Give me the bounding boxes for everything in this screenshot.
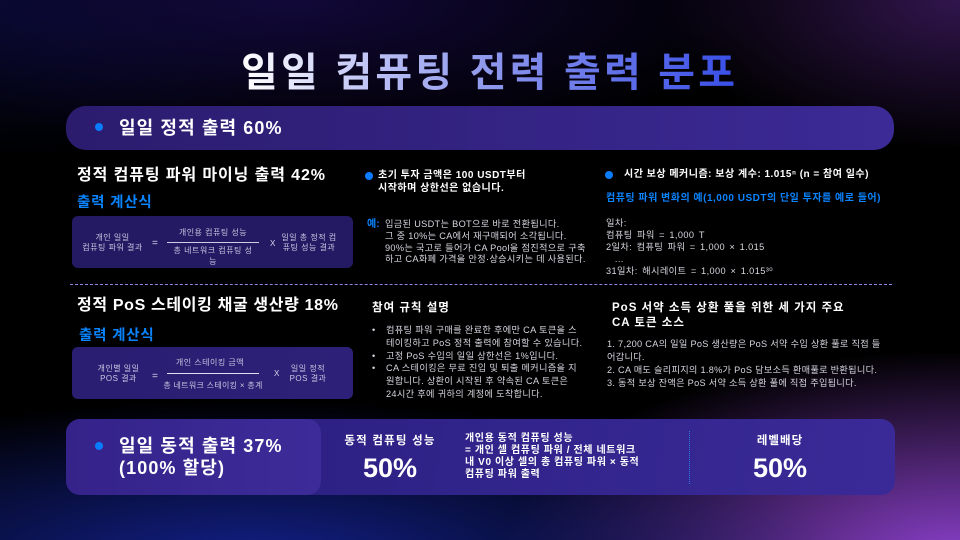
heading xyxy=(119,436,283,478)
formula left term xyxy=(82,233,143,252)
numbered list: 2. CA 매도 슬리피지의 1.8%가 PoS 담보소득 환매풀로 반환됩니다. xyxy=(607,365,877,375)
stat: leverage dividend xyxy=(753,434,807,483)
rule list: 24시간 후에 귀하의 계정에 도착합니다. xyxy=(386,389,543,399)
panel: static PoS staking xyxy=(72,296,353,399)
note: initial investment xyxy=(365,169,526,194)
formula right term: 일일 정적 xyxy=(291,364,325,373)
calculation lines: 2일차: 컴퓨팅 파워 = 1,000 × 1.015 xyxy=(606,242,765,252)
stat: dynamic performance xyxy=(344,434,436,483)
stat: dynamic performance: 50% xyxy=(363,453,417,483)
formula right term: 일일 총 정적 컴 xyxy=(281,233,337,242)
formula text: 개인용 동적 컴퓨팅 성능 xyxy=(465,433,573,444)
calculation lines: 일차: xyxy=(606,218,627,228)
rule list: 컴퓨팅 파워 구매를 완료한 후에만 CA 토큰을 스 xyxy=(386,325,577,335)
bullet xyxy=(365,172,373,180)
formula box xyxy=(72,216,353,268)
formula right term: 퓨팅 성능 결과 xyxy=(283,243,335,252)
rule list: 원합니다. 상환이 시작된 후 약속된 CA 토큰은 xyxy=(386,376,568,386)
dashed divider xyxy=(70,284,892,285)
banner icon: bullet xyxy=(95,123,103,131)
calculation lines: ... xyxy=(615,254,624,264)
fraction: 개인용 컴퓨팅 성능 xyxy=(179,228,247,237)
panel: time reward mechanism xyxy=(605,168,881,276)
example body: 입금된 USDT는 BOT으로 바로 전환됩니다. xyxy=(385,219,560,229)
rule list: CA 스테이킹은 무료 진입 및 퇴출 메커니즘을 지 xyxy=(386,363,577,373)
formula left term: 컴퓨팅 파워 결과 xyxy=(82,243,143,252)
banner: daily static output xyxy=(66,106,894,150)
numbered list: 어갑니다. xyxy=(607,352,645,362)
fraction xyxy=(167,228,259,266)
equals sign: = xyxy=(152,371,158,382)
formula box xyxy=(72,347,353,399)
stat: dynamic performance: 동적 컴퓨팅 성능 xyxy=(344,435,436,447)
fraction: 총 네트워크 스테이킹 × 총계 xyxy=(163,381,263,390)
multiply sign: X xyxy=(270,239,275,248)
heading: 참여 규칙 설명 xyxy=(372,302,450,314)
fraction: 능 xyxy=(209,257,217,266)
highlighted heading box xyxy=(66,419,321,495)
blue example heading: 컴퓨팅 파워 변화의 예(1,000 USDT의 단일 투자를 예로 들어) xyxy=(606,193,881,204)
rule list: • xyxy=(372,363,376,373)
numbered list: 1. 7,200 CA의 일일 PoS 생산량은 PoS 서약 수입 상환 풀로 직접 들 xyxy=(607,339,881,349)
equals sign: = xyxy=(152,238,158,249)
formula text xyxy=(465,432,639,480)
formula text: = 개인 셀 컴퓨팅 파워 / 전체 네트워크 xyxy=(465,445,636,456)
formula left term xyxy=(97,364,140,383)
numbered list xyxy=(607,339,881,388)
heading: CA 토큰 소스 xyxy=(612,316,685,328)
bullet xyxy=(95,442,103,450)
heading: 시간 보상 메커니즘: 보상 계수: 1.015ⁿ (n = 참여 일수) xyxy=(624,169,869,180)
rule list xyxy=(372,325,582,399)
text xyxy=(378,169,526,194)
calculation lines: 컴퓨팅 파워 = 1,000 T xyxy=(606,230,705,240)
title: 일일 컴퓨팅 전력 출력 분포 xyxy=(241,51,738,95)
rule list: 테이킹하고 PoS 정적 출력에 참여할 수 있습니다. xyxy=(386,338,582,348)
text: 시작하며 상한선은 없습니다. xyxy=(378,182,504,194)
calculation lines: 31일차: 해시레이트 = 1,000 × 1.015³⁰ xyxy=(606,266,773,276)
fraction: 개인 스테이킹 금액 xyxy=(176,358,244,367)
formula right term xyxy=(290,364,326,383)
heading: 일일 동적 출력 37% xyxy=(119,436,283,456)
example body: 하고 CA화폐 가격을 안정·상승시키는 데 사용된다. xyxy=(385,254,586,264)
rule list: 고정 PoS 수입의 일일 상한선은 1%입니다. xyxy=(386,351,558,361)
subheading: 출력 계산식 xyxy=(77,195,153,211)
heading: (100% 할당) xyxy=(119,458,225,478)
formula right term xyxy=(281,233,337,252)
formula text: 내 V0 이상 셀의 총 컴퓨팅 파워 × 동적 xyxy=(465,457,639,468)
formula right term: POS 결과 xyxy=(290,374,326,383)
numbered list: 3. 동적 보상 잔액은 PoS 서약 소득 상환 풀에 직접 주입됩니다. xyxy=(607,378,857,388)
stat: leverage dividend: 레벨배당 xyxy=(757,435,803,447)
example body: 90%는 국고로 들어가 CA Pool을 점진적으로 구축 xyxy=(385,243,586,253)
heading: PoS 서약 소득 상환 풀을 위한 세 가지 주요 xyxy=(612,302,845,314)
panel: daily dynamic output xyxy=(66,419,895,495)
bullet xyxy=(605,171,613,179)
panel: participation rules xyxy=(372,301,582,399)
heading xyxy=(612,301,845,328)
panel: PoS income sources xyxy=(607,301,881,388)
panel: static computing mining output xyxy=(72,166,353,268)
stat: leverage dividend: 50% xyxy=(753,453,807,483)
formula left term: POS 결과 xyxy=(100,374,137,383)
example body xyxy=(385,219,586,264)
dotted divider xyxy=(689,431,690,484)
fraction xyxy=(163,358,263,390)
formula text: 컴퓨팅 파워 출력 xyxy=(465,469,540,480)
heading: 정적 컴퓨팅 파워 마이닝 출력 42% xyxy=(77,167,326,184)
banner heading: 일일 정적 출력 60% xyxy=(119,118,283,138)
example text xyxy=(367,218,586,264)
formula left term: 개인 일일 xyxy=(95,233,130,242)
example label: 예: xyxy=(367,219,380,230)
rule list: • xyxy=(372,325,376,335)
formula left term: 개인별 일일 xyxy=(97,364,140,373)
example body: 그 중 10%는 CA에서 재구매되어 소각됩니다. xyxy=(385,231,567,241)
text: 초기 투자 금액은 100 USDT부터 xyxy=(378,170,526,181)
rule list: • xyxy=(372,351,376,361)
subheading: 출력 계산식 xyxy=(79,328,155,344)
heading: 정적 PoS 스테이킹 채굴 생산량 18% xyxy=(77,297,339,314)
multiply sign: X xyxy=(274,369,279,378)
fraction: 총 네트워크 컴퓨팅 성 xyxy=(174,246,252,255)
calculation lines xyxy=(606,218,773,276)
